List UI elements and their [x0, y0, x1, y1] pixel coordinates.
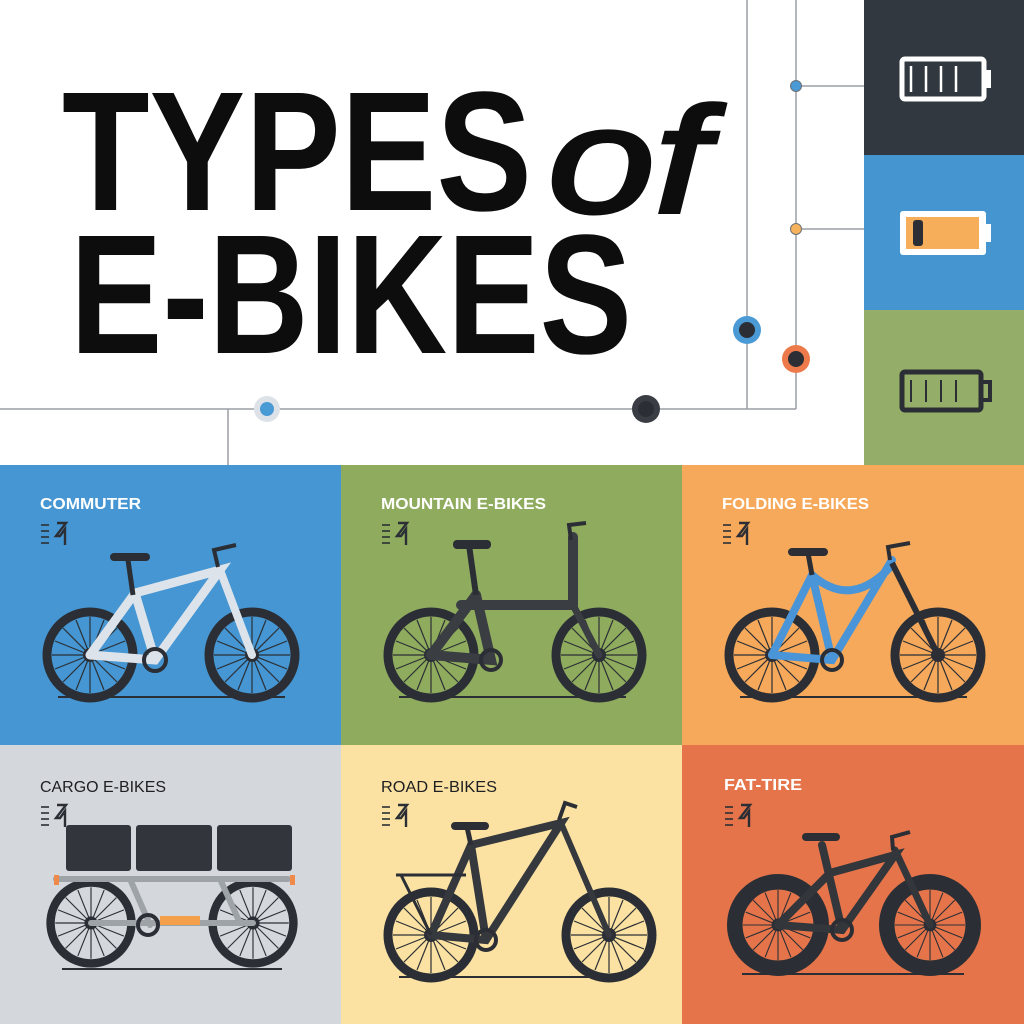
panel: fat-tire: FAT-TIRE	[724, 777, 802, 794]
bike	[388, 523, 642, 698]
title	[62, 57, 725, 390]
panel: commuter	[0, 465, 341, 745]
panel: battery green	[864, 310, 1024, 465]
panel: mountain e-bikes	[341, 465, 682, 745]
panel: battery charging	[864, 155, 1024, 310]
title: of	[548, 76, 725, 244]
panel: fat-tire	[682, 745, 1024, 1024]
panel: road e-bikes	[341, 745, 682, 1024]
panel: cargo e-bikes: CARGO E-BIKES	[40, 779, 166, 796]
bike	[47, 545, 295, 698]
bike	[729, 543, 981, 698]
circuit nodes	[254, 80, 810, 423]
circuit lines	[0, 0, 864, 465]
bike	[388, 803, 652, 978]
bike	[734, 832, 974, 974]
bike	[51, 825, 295, 969]
panel: battery full	[864, 0, 1024, 155]
panel: folding e-bikes	[682, 465, 1024, 745]
panel: road e-bikes: ROAD E-BIKES	[381, 779, 497, 796]
title: E-BIKES	[70, 200, 632, 390]
title: TYPES	[62, 57, 532, 247]
panel: commuter: COMMUTER	[40, 496, 141, 513]
panel: cargo e-bikes	[0, 745, 341, 1024]
background: title area	[0, 0, 864, 465]
panel: mountain e-bikes: MOUNTAIN E-BIKES	[381, 496, 546, 513]
panel: folding e-bikes: FOLDING E-BIKES	[722, 496, 869, 513]
